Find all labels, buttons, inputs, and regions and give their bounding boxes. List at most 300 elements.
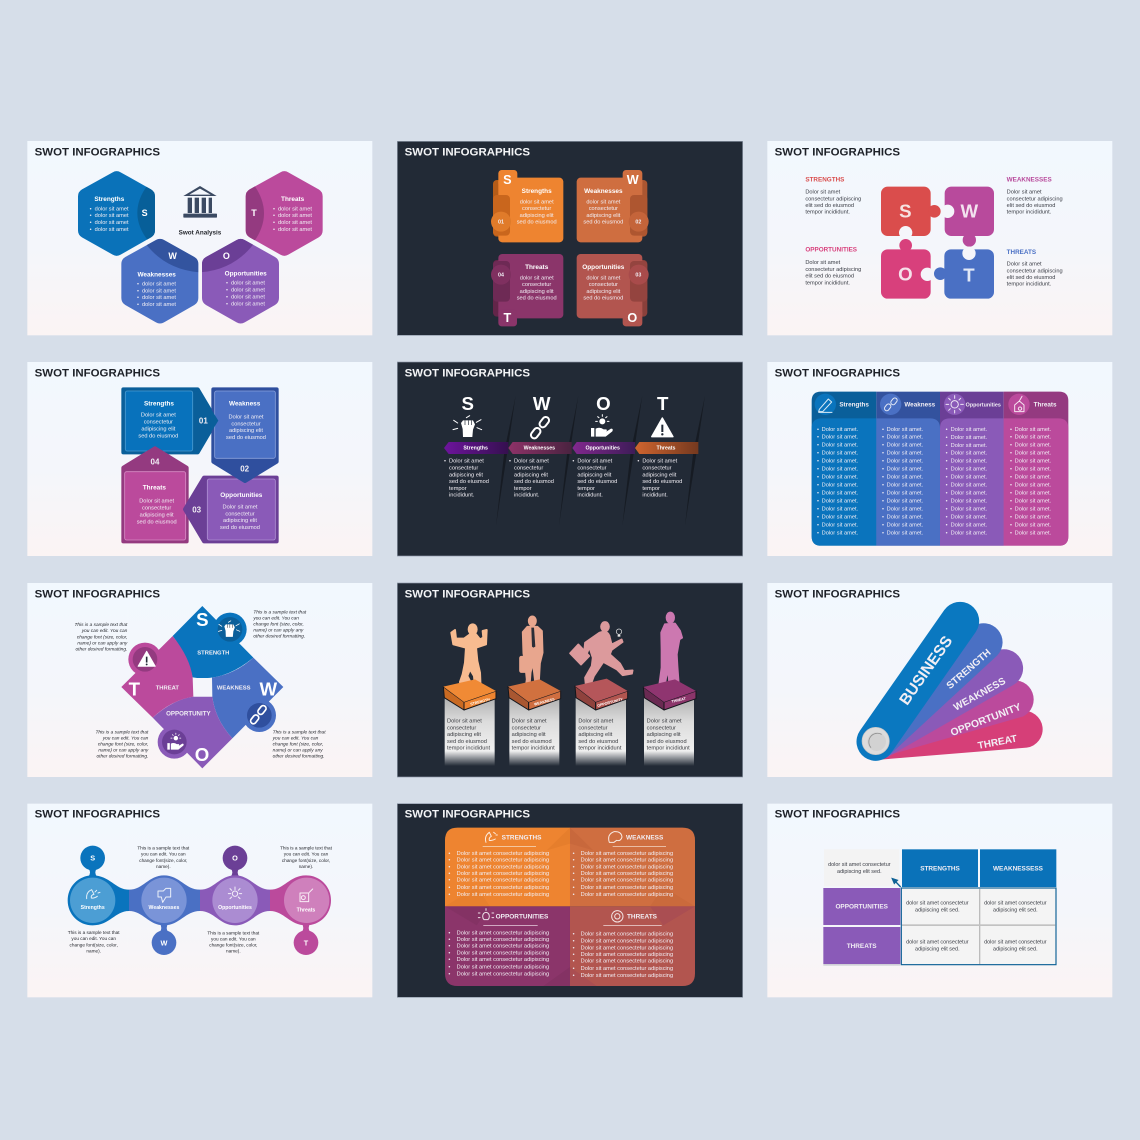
column: strengths: Dolor sit amet. [822,507,859,513]
column: weakness: Dolor sit amet. [887,530,924,536]
text: opportunities [805,246,861,286]
hexagon: weaknesses: dolor sit amet [142,281,176,287]
column: opportunities: • [946,475,948,481]
header: weaknesses: WEAKNESSESS [993,865,1044,872]
column: opportunities: Opportunities [585,446,620,452]
block: threats: Dolor sit amet [139,499,175,505]
note: opportunities: you can edit. You can [211,936,256,941]
title: SWOT INFOGRAPHICS [405,147,530,159]
column: strengths: sed do eiusmod [449,479,489,485]
pedestal: strength: consectetur [447,725,476,731]
text: threats: elit sed do eiusmod [1007,275,1055,281]
column: strengths: Dolor sit amet. [822,435,859,441]
column: weakness: • [882,467,884,473]
quadrant: opportunities: OPPORTUNITIES [496,914,549,921]
pivot knob [862,727,889,755]
column: opportunities: Dolor sit amet. [951,530,988,536]
quadrant: opportunities: • [448,950,450,956]
column: strengths: • [817,467,819,473]
column: opportunities: Dolor sit amet. [951,483,988,489]
column: strengths: • [817,482,819,488]
column: opportunities: Dolor sit amet. [951,443,988,449]
block: strengths: sed do eiusmod [138,433,178,439]
column: threats: • [1010,530,1012,536]
column: weakness: • [882,435,884,441]
hexagon: strengths: • [90,206,92,212]
pedestal: opportunity: adipiscing elit [578,732,613,738]
panel: table SWOT [767,362,1112,556]
hexagon: weaknesses: • [137,295,139,301]
tile: opportunities: O [627,311,637,325]
column: opportunities [572,393,635,499]
fan blade: opportunity: OPPORTUNITY [949,702,1023,739]
icon: warning [128,643,162,676]
block: strengths: 01 [199,417,208,426]
column: opportunities: Dolor sit amet. [951,459,988,465]
quadrant: strengths: Dolor sit amet consectetur adipiscing [457,851,549,857]
column: strengths: Dolor sit amet. [822,443,859,449]
block: opportunities: consectetur [225,511,255,517]
column: weakness: • [882,458,884,464]
quadrant: threats: Dolor sit amet consectetur adipiscing [581,932,673,938]
column: strengths: Dolor sit amet. [822,498,859,504]
column: strengths: • [817,522,819,528]
quadrant: strengths: • [448,871,450,877]
pedestal: threat: adipiscing elit [647,732,681,738]
column: opportunities: • [946,459,948,465]
quadrant: weakness: Dolor sit amet consectetur adipiscing [581,885,673,891]
icon: fist [213,613,247,646]
column: threats: Dolor sit amet. [1015,507,1052,513]
note: threats: This is a sample text that [280,846,333,851]
column: threats: • [637,458,639,464]
column: weakness: Dolor sit amet. [887,435,924,441]
column: strengths: • [817,507,819,513]
quadrant: weakness: • [573,871,575,877]
quadrant: strengths: Dolor sit amet consectetur adipiscing [457,892,549,898]
quadrant: opportunities: Dolor sit amet consectetur adipiscing [457,964,549,970]
row header: threats [823,927,900,966]
quadrant: threats: • [573,932,575,938]
column: weakness: Dolor sit amet. [887,514,924,520]
pedestal: threat: sed do eiusmod [647,739,687,745]
hexagon: opportunities: Opportunities [225,271,267,278]
panel: puzzle SWOT [767,141,1112,335]
text: weaknesses: tempor incididunt. [1007,210,1052,216]
block: weakness: adipiscing elit [229,428,263,434]
icon: hand [158,725,191,759]
note: bottom right: other desired formatting. [273,754,324,760]
note: threats: name). [299,864,313,869]
pedestal: strength [443,679,496,766]
column: strengths: S [461,393,474,414]
column: strengths: Strengths [839,402,869,409]
column: threats: Threats [657,446,676,452]
note: opportunities: name). [226,949,241,954]
hexagon: threats: dolor sit amet [278,206,312,212]
node: threats: T [304,938,309,947]
text: threats: THREATS [1007,249,1036,256]
figure: person with crossed arms [659,613,682,689]
quadrant: strengths: • [448,851,450,857]
tile: strengths: 01 [498,220,504,226]
column: strengths: Strengths [463,446,488,452]
column: weaknesses: sed do eiusmod [514,479,554,485]
quadrant: threats: Dolor sit amet consectetur adipiscing [581,966,673,972]
quadrant: strengths: • [448,878,450,884]
hexagon: opportunities: dolor sit amet [231,288,265,294]
column: threats: Dolor sit amet. [1015,435,1052,441]
node: opportunities [200,846,270,925]
block: strengths: Strengths [144,400,174,407]
quadrant: weakness: Dolor sit amet consectetur adipiscing [581,892,673,898]
note: bottom left: you can edit. You can [102,735,149,741]
column: threats: sed do eiusmod [642,479,682,485]
column: strengths: Dolor sit amet. [822,475,859,481]
column: weakness: Dolor sit amet. [887,522,924,528]
quadrant: weakness [570,828,695,906]
hexagon: weaknesses: • [137,302,139,308]
fan blade: weakness [873,649,1023,758]
column: opportunities: Dolor sit amet. [951,475,988,481]
text: strengths: consectetur adipiscing [805,196,861,202]
text: opportunities: consectetur adipiscing [805,267,861,273]
column: threats: incididunt. [642,493,668,499]
note: top right: This is a sample text that [253,609,307,615]
text: weaknesses: Dolor sit amet [1007,189,1042,195]
column: threats: Dolor sit amet. [1015,514,1052,520]
fan blade: threat [876,711,1043,760]
column: threats: Dolor sit amet. [1015,530,1052,536]
quadrant: threats: • [573,973,575,979]
title: SWOT INFOGRAPHICS [775,147,900,159]
sector: opportunity: OPPORTUNITY [166,710,211,717]
fan blade: strength [873,623,1003,758]
column: strengths: Dolor sit amet. [822,458,859,464]
column: weakness: Dolor sit amet. [887,507,924,513]
column: threats: • [1010,458,1012,464]
matrix body: dolor sit amet consectetur [984,939,1047,945]
hexagon: threats: • [273,227,275,233]
column: threats: Dolor sit amet. [1015,490,1052,496]
column: threats: • [1010,427,1012,433]
column: weaknesses [508,393,572,499]
tile: opportunities [577,254,649,326]
quadrant: threats [570,906,695,986]
pedestal: weakness [508,679,561,766]
figure: person with briefcase [520,616,543,690]
title: SWOT INFOGRAPHICS [35,147,160,159]
column: weakness: • [882,514,884,520]
column: weakness: • [882,450,884,456]
block: weakness [213,389,277,481]
column: opportunities: sed do eiusmod [577,479,617,485]
text: threats: tempor incididunt. [1007,282,1052,288]
column: strengths: Dolor sit amet [449,458,484,464]
quadrant: opportunities: • [448,971,450,977]
quadrant: weakness: • [573,858,575,864]
tile: strengths: Strengths [522,188,552,195]
hexagon: weaknesses: W [168,251,177,261]
header: weaknesses [980,849,1056,887]
fan blade: threat: THREAT [977,734,1018,752]
puzzle piece: S: S [899,200,912,221]
block: weakness: 02 [240,465,250,474]
cell: intro note [824,849,899,886]
column: weakness: Weakness [904,402,936,409]
tile: strengths: sed do eiusmod [517,220,557,226]
fan blade: strength: STRENGTH [945,647,993,692]
note: bottom right: you can edit. You can [272,735,319,741]
quadrant: strengths: Dolor sit amet consectetur adipiscing [457,885,549,891]
hexagon: weaknesses [121,235,200,323]
column: opportunities: • [946,491,948,497]
hexagon: threats: Threats [281,196,305,203]
tile: opportunities: dolor sit amet [586,275,621,281]
panel: matrix SWOT [767,804,1112,997]
column: opportunities: Dolor sit amet. [951,491,988,497]
block: threats: sed do eiusmod [137,519,177,525]
column: weakness: Dolor sit amet. [887,490,924,496]
hexagon: weaknesses: • [137,288,139,294]
note: weaknesses: you can edit. You can [141,852,186,857]
note: bottom left: This is a sample text that [95,729,149,735]
block: opportunities: 03 [192,505,202,514]
note: top left: This is a sample text that [74,622,128,628]
column: opportunities: incididunt. [577,493,603,499]
text: strengths [805,177,861,216]
cell: intro note: dolor sit amet consectetur [828,862,891,868]
header: strengths: STRENGTHS [920,865,961,872]
hexagon: threats [240,171,323,256]
title: SWOT INFOGRAPHICS [35,367,160,379]
tile: threats: dolor sit amet [520,275,554,281]
title: SWOT INFOGRAPHICS [775,588,900,600]
hexagon: threats: • [273,206,275,212]
quadrant: threats: Dolor sit amet consectetur adipiscing [581,945,673,951]
block: threats [123,448,187,541]
column: weakness: • [882,443,884,449]
pedestal: threat: Dolor sit amet [647,718,682,724]
tile: strengths: adipiscing elit [520,213,554,219]
sector: opportunity [153,697,232,768]
column: opportunities: tempor [577,486,595,492]
note: bottom right: change font (size, color, [273,742,323,748]
pedestal: weakness: tempor incididunt [512,746,555,752]
column: opportunities: • [946,483,948,489]
quadrant: opportunities: • [448,944,450,950]
hexagon: threats: T [251,208,257,218]
tile: strengths: consectetur [522,206,551,212]
quadrant: strengths [445,828,570,906]
note: weaknesses: This is a sample text that [137,846,190,851]
note: strengths: This is a sample text that [68,930,120,935]
title: SWOT INFOGRAPHICS [405,588,530,600]
puzzle piece: T: T [963,265,975,286]
column: threats: • [1010,475,1012,481]
tile: strengths: S [503,173,512,187]
column: threats: Threats [1034,402,1057,409]
sector: strength [173,606,253,678]
text: threats: consectetur adipiscing [1007,268,1063,274]
hexagon: threats: dolor sit amet [278,213,312,219]
matrix body: adipiscing elit sed. [915,907,960,913]
tile: threats: sed do eiusmod [517,296,557,302]
tile: opportunities: adipiscing elit [586,289,621,295]
sector: weakness: W [260,678,278,699]
note: top right: name) or can apply any [253,628,304,634]
block: opportunities: sed do eiusmod [220,525,260,531]
column: weakness: Dolor sit amet. [887,467,924,473]
column: opportunities: O [596,393,611,414]
block: strengths: adipiscing elit [141,427,176,433]
tile: opportunities: consectetur [589,282,618,288]
column: opportunities: • [946,507,948,513]
matrix body: dolor sit amet consectetur [906,900,969,906]
quadrant: opportunities: • [448,937,450,943]
block: threats: 04 [151,457,160,466]
quadrant: opportunities: Dolor sit amet consectetur adipiscing [457,971,549,977]
sector: weakness [212,658,283,738]
quadrant: threats: • [573,966,575,972]
column: opportunities: Dolor sit amet. [951,451,988,457]
quadrant: threats: Dolor sit amet consectetur adipiscing [581,959,673,965]
column: weaknesses: consectetur [514,465,543,471]
column: threats [1008,394,1057,536]
block: weakness: Weakness [229,400,261,407]
column: strengths: • [817,458,819,464]
column: strengths: • [817,498,819,504]
sector: threat [121,636,193,718]
row header: threats: THREATS [847,943,877,950]
column: strengths: Dolor sit amet. [822,482,859,488]
column: opportunities: Dolor sit amet. [951,507,988,513]
column: strengths: Dolor sit amet. [822,514,859,520]
column: threats: • [1010,498,1012,504]
puzzle piece: T [934,247,994,299]
quadrant: threats: Dolor sit amet consectetur adipiscing [581,973,673,979]
hexagon: weaknesses: • [137,281,139,287]
column: opportunities: • [572,458,574,464]
sector: strength: S [196,609,209,630]
hexagon: strengths: S [142,208,148,218]
quadrant: weakness: • [573,885,575,891]
quadrant: weakness: • [573,851,575,857]
block: opportunities: adipiscing elit [223,518,257,524]
panel: diamond SWOT [27,583,372,777]
column: threats: T [657,393,669,414]
block: threats: adipiscing elit [140,512,174,518]
figure: victorious person [451,624,487,690]
quadrant: opportunities: Dolor sit amet consectetur adipiscing [457,950,549,956]
quadrant: opportunities: Dolor sit amet consectetur adipiscing [457,930,549,936]
tile: opportunities: sed do eiusmod [583,296,623,302]
column: threats: Dolor sit amet. [1015,467,1052,473]
column: strengths: • [817,450,819,456]
column: threats: adipiscing elit [642,472,677,478]
puzzle piece: O: O [898,263,913,284]
hexagon: opportunities: dolor sit amet [231,281,265,287]
block: strengths [123,389,216,452]
slash shadows [496,396,705,526]
column: opportunities: Dolor sit amet. [951,427,988,433]
column: opportunities: • [946,523,948,529]
title: SWOT INFOGRAPHICS [405,367,530,379]
block: weakness: consectetur [231,421,261,427]
pedestal: opportunity: OPPORTUNITY [597,697,624,708]
node: opportunities: Opportunities [218,905,252,911]
quadrant: threats: THREATS [627,914,658,921]
note: bottom left: name) or can apply any [98,748,149,754]
column: weakness: • [882,427,884,433]
matrix body [901,888,1056,965]
column: threats: Dolor sit amet. [1015,443,1052,449]
column: threats: Dolor sit amet. [1015,458,1052,464]
column: strengths: Dolor sit amet. [822,427,859,433]
tile: weaknesses: W [627,173,639,187]
column: opportunities: adipiscing elit [577,472,612,478]
hexagon: strengths: • [90,227,92,233]
note: bottom left: other desired formatting. [97,754,148,760]
column: threats: • [1010,482,1012,488]
panel: fan SWOT [767,583,1112,777]
quadrant: strengths: STRENGTHS [502,835,542,842]
puzzle piece: O [881,239,934,299]
fan blade: weakness: WEAKNESS [952,676,1008,713]
icon: chain [243,699,276,732]
note: top right: change font (size, color, [253,622,304,628]
hexagon: strengths: dolor sit amet [95,206,129,212]
tile: strengths [491,170,563,242]
note: strengths: name). [86,948,101,953]
column: opportunities: • [946,443,948,449]
node: strengths: S [90,854,95,863]
hexagon: weaknesses: dolor sit amet [142,302,176,308]
quadrant: weakness: • [573,864,575,870]
pedestal: threat: THREAT [671,697,687,704]
column: weakness: • [882,490,884,496]
pedestal: threat [643,679,696,766]
column: opportunities: consectetur [577,465,607,471]
text: weaknesses [1007,177,1063,216]
hexagon: strengths [78,171,160,256]
note: bottom left: change font (size, color, [98,742,148,748]
column: strengths: consectetur [449,465,478,471]
column: weakness: Dolor sit amet. [887,450,924,456]
quadrant: strengths: • [448,858,450,864]
tile: opportunities: Opportunities [582,264,625,271]
text: strengths: Dolor sit amet [805,189,841,195]
panel: four quadrant SWOT [397,804,743,997]
quadrant: threats: • [573,952,575,958]
column: threats: Dolor sit amet. [1015,522,1052,528]
quadrant: strengths: • [448,864,450,870]
title: SWOT INFOGRAPHICS [405,809,530,821]
pedestal: strength: tempor incididunt [447,746,491,752]
column: threats: Dolor sit amet. [1015,427,1052,433]
block: weakness: Dolor sit amet [229,414,264,420]
column: weaknesses: incididunt. [514,493,540,499]
matrix body: adipiscing elit sed. [915,946,960,952]
quadrant: weakness: Dolor sit amet consectetur adipiscing [581,864,673,870]
note: strengths: change font(size, color, [70,942,118,947]
column: strengths: • [817,443,819,449]
column: opportunities: Opportunities [966,403,1001,409]
block: opportunities: Opportunities [220,492,263,499]
column: strengths: incididunt. [449,493,475,499]
node: strengths: Strengths [81,905,105,911]
column: strengths [444,393,508,499]
